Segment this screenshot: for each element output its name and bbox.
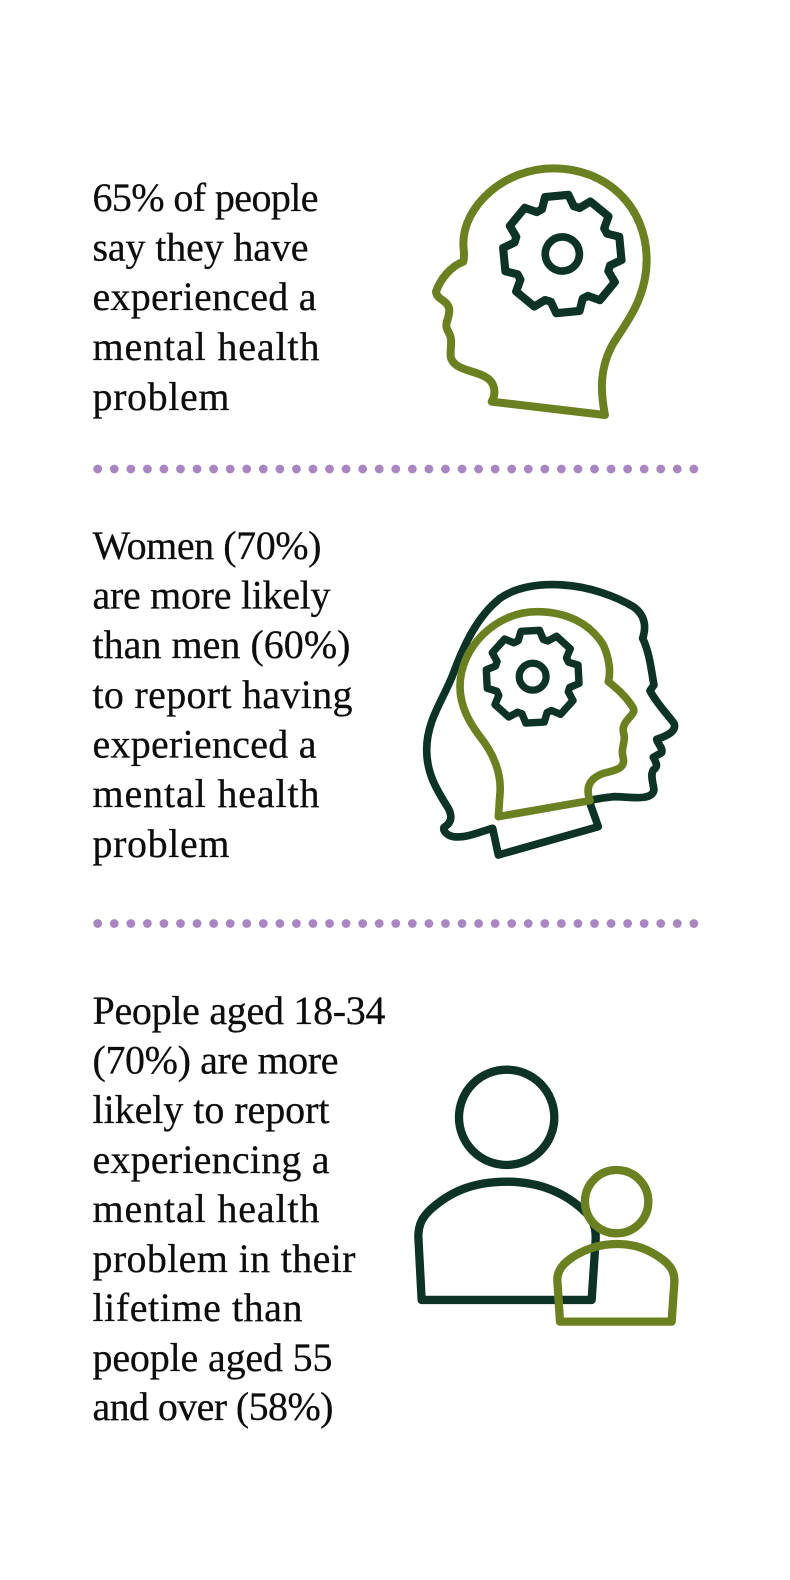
text block: people aged 18-34	[92, 988, 386, 1429]
text block: women vs men: mental health	[92, 771, 320, 816]
text block: women vs men: are more likely	[92, 572, 330, 618]
text block: women vs men: problem	[92, 821, 230, 866]
text block: people aged 18-34: People aged 18-34	[92, 988, 386, 1033]
text block: people aged 18-34: (70%) are more	[92, 1038, 338, 1082]
text block: people aged 18-34: people aged 55	[92, 1335, 332, 1380]
text block: women vs men	[92, 523, 352, 866]
text block: people aged 18-34: problem in their	[92, 1236, 356, 1281]
text block: 65% of people: experienced a	[92, 274, 317, 319]
text block: women vs men: than men (60%)	[92, 622, 350, 667]
text block: people aged 18-34: lifetime than	[92, 1285, 302, 1330]
text block: people aged 18-34: mental health	[92, 1186, 320, 1231]
text block: people aged 18-34: likely to report	[92, 1087, 330, 1132]
icon: two overlapping heads with gear	[427, 585, 675, 855]
text block: people aged 18-34: and over (58%)	[92, 1384, 334, 1429]
text block: 65% of people	[92, 175, 320, 419]
icon: adult and child figures	[418, 1070, 674, 1322]
text block: women vs men: Women (70%)	[92, 523, 322, 568]
text block: 65% of people: 65% of people	[92, 175, 318, 220]
icon: head with gear (green)	[436, 168, 647, 415]
text block: people aged 18-34: experiencing a	[92, 1137, 330, 1182]
text block: women vs men: to report having	[92, 672, 352, 717]
text block: 65% of people: say they have	[92, 224, 308, 270]
text block: women vs men: experienced a	[92, 722, 317, 766]
text block: 65% of people: problem	[92, 374, 230, 419]
text block: 65% of people: mental health	[92, 324, 320, 369]
